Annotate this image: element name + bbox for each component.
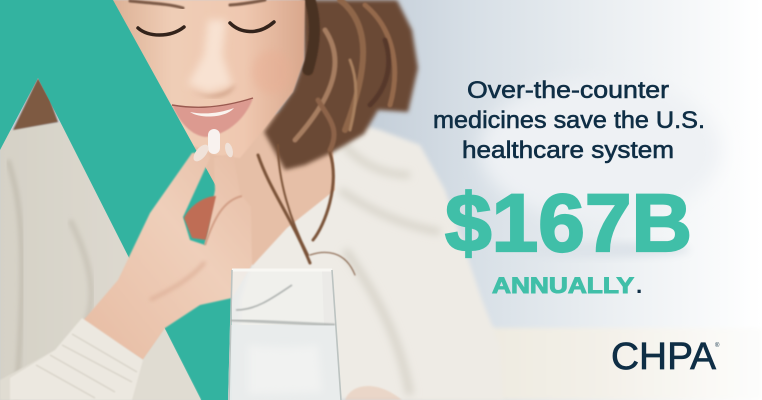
big figure: $167B: $167B — [445, 178, 692, 269]
fingernails — [191, 142, 234, 164]
headline: Over-the-counter — [467, 77, 669, 104]
hand holding pill — [82, 152, 252, 360]
annually label: ANNUALLY — [492, 273, 634, 298]
eyebrows — [130, 0, 265, 8]
woman's hair — [264, 0, 418, 170]
finger crease — [205, 196, 242, 245]
nose shadow — [188, 84, 236, 97]
hair strands over chest — [258, 145, 355, 275]
sweater sleeve — [0, 318, 201, 400]
lips — [172, 98, 253, 137]
teal chevron shape — [0, 0, 243, 400]
CHPA logo: CHPA — [611, 336, 717, 378]
headline: healthcare system — [462, 137, 674, 164]
woman's sweater, back layer — [0, 117, 503, 400]
closed eyes with lashes — [138, 22, 274, 35]
dark hair behind shoulder, left — [13, 78, 58, 130]
cheek blush — [252, 50, 292, 94]
CHPA logo: ® — [715, 342, 720, 349]
pill — [208, 129, 220, 154]
headline: medicines save the U.S. — [433, 107, 705, 134]
annually label: . — [636, 273, 642, 298]
headline — [433, 77, 705, 164]
palm shadow between fingers — [184, 196, 216, 240]
woman's face — [100, 0, 305, 158]
teeth — [190, 108, 234, 117]
woman's neck and chest — [190, 110, 335, 265]
nose highlight — [188, 20, 232, 92]
glass of water — [228, 270, 402, 400]
